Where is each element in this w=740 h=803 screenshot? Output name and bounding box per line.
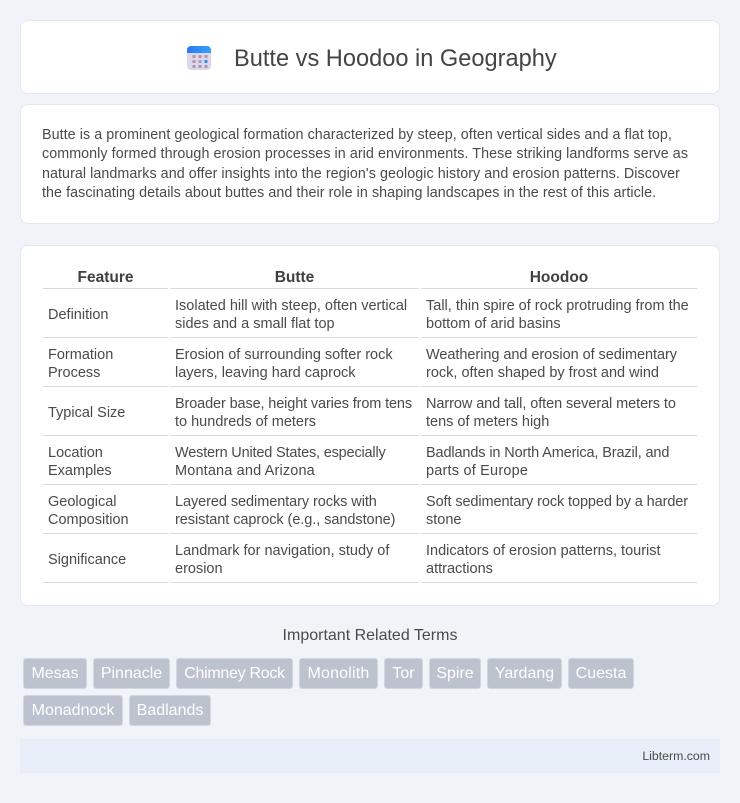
- row: geological composition: stone: [426, 512, 461, 528]
- intro text: natural landmarks and offer insights into the region's geologic history and erosion patterns. Discover: [42, 166, 680, 182]
- row: location examples: Badlands in North America, Brazil, and: [426, 445, 669, 461]
- title: Butte vs Hoodoo in Geography: [234, 46, 557, 72]
- tag: Mesas: [23, 658, 87, 689]
- tag: Chimney Rock: Chimney Rock: [184, 665, 285, 682]
- row: definition: Tall, thin spire of rock protruding from the: [426, 298, 689, 314]
- footer bar: [20, 739, 720, 773]
- footer source: Libterm.com: [642, 749, 710, 763]
- tag: Cuesta: Cuesta: [576, 665, 626, 682]
- row: significance: Indicators of erosion patterns, tourist: [426, 543, 661, 559]
- row: geological composition: resistant caprock (e.g., sandstone): [175, 512, 395, 528]
- row: definition: [48, 298, 689, 332]
- comparison table panel: [20, 245, 720, 606]
- tag: Tor: [384, 658, 423, 689]
- tag: Mesas: Mesas: [31, 665, 79, 682]
- tag: Badlands: [129, 695, 211, 726]
- row: location examples: parts of Europe: [426, 463, 528, 479]
- row: typical size: to hundreds of meters: [175, 414, 316, 430]
- table headers: Feature: [78, 269, 134, 286]
- row: formation process: rock, often shaped by frost and wind: [426, 365, 659, 381]
- row: location examples: Location: [48, 445, 103, 461]
- row: geological composition: Soft sedimentary rock topped by a harder: [426, 494, 688, 510]
- tag: Badlands: Badlands: [137, 702, 203, 719]
- row: location examples: Western United States, especially: [175, 445, 386, 461]
- intro text panel: [20, 104, 720, 224]
- table headers: Hoodoo: [530, 269, 588, 286]
- tag: Cuesta: [568, 658, 634, 689]
- row: formation process: Process: [48, 365, 100, 381]
- tag: Yardang: Yardang: [495, 665, 554, 682]
- tag: Spire: [429, 658, 481, 689]
- tag: Chimney Rock: [176, 658, 293, 689]
- row: location examples: [48, 445, 669, 479]
- icon: calendar: [187, 46, 211, 70]
- header card: [20, 20, 720, 94]
- row: typical size: Broader base, height varies from tens: [175, 396, 412, 412]
- row: definition: Definition: [48, 307, 108, 323]
- row: formation process: Erosion of surrounding softer rock: [175, 347, 393, 363]
- row: typical size: [48, 396, 676, 430]
- row: typical size: Typical Size: [48, 405, 125, 421]
- row: location examples: Montana and Arizona: [175, 463, 315, 479]
- intro text: the fascinating details about buttes and their role in shaping landscapes in the rest of this article.: [42, 185, 656, 201]
- tag: Monolith: [299, 658, 378, 689]
- row: significance: [48, 543, 661, 577]
- intro text: [42, 126, 688, 201]
- row: formation process: [48, 347, 677, 381]
- row: formation process: Weathering and erosion of sedimentary: [426, 347, 677, 363]
- tag: Monadnock: [23, 695, 123, 726]
- table headers: Butte: [275, 269, 314, 286]
- row: significance: Landmark for navigation, study of: [175, 543, 389, 559]
- row: typical size: tens of meters high: [426, 414, 549, 430]
- row: definition: Isolated hill with steep, often vertical: [175, 298, 407, 314]
- row: formation process: Formation: [48, 347, 113, 363]
- row: geological composition: Composition: [48, 512, 129, 528]
- tag: Monolith: Monolith: [307, 665, 370, 682]
- row: significance: Significance: [48, 552, 126, 568]
- row: geological composition: Layered sedimentary rocks with: [175, 494, 377, 510]
- row: typical size: Narrow and tall, often several meters to: [426, 396, 676, 412]
- row: geological composition: Geological: [48, 494, 117, 510]
- row: formation process: layers, leaving hard caprock: [175, 365, 356, 381]
- table headers: [78, 269, 588, 286]
- row: geological composition: [48, 494, 688, 528]
- tag: Spire: Spire: [436, 665, 474, 682]
- tag: Yardang: [487, 658, 562, 689]
- tag: Monadnock: Monadnock: [32, 702, 114, 719]
- intro text: Butte is a prominent geological formation characterized by steep, often vertical sides and a flat top,: [42, 126, 672, 142]
- row: definition: bottom of arid basins: [426, 316, 561, 332]
- tag: Pinnacle: [93, 658, 170, 689]
- tag: Pinnacle: Pinnacle: [101, 665, 162, 682]
- intro text: commonly formed through erosion processes in arid environments. These striking landforms serve as: [42, 146, 688, 162]
- row: location examples: Examples: [48, 463, 112, 479]
- related terms tags: [23, 658, 634, 726]
- row: significance: erosion: [175, 561, 223, 577]
- tag: Tor: Tor: [392, 665, 415, 682]
- row: definition: sides and a small flat top: [175, 316, 335, 332]
- related terms heading: Important Related Terms: [283, 627, 457, 644]
- row: significance: attractions: [426, 561, 493, 577]
